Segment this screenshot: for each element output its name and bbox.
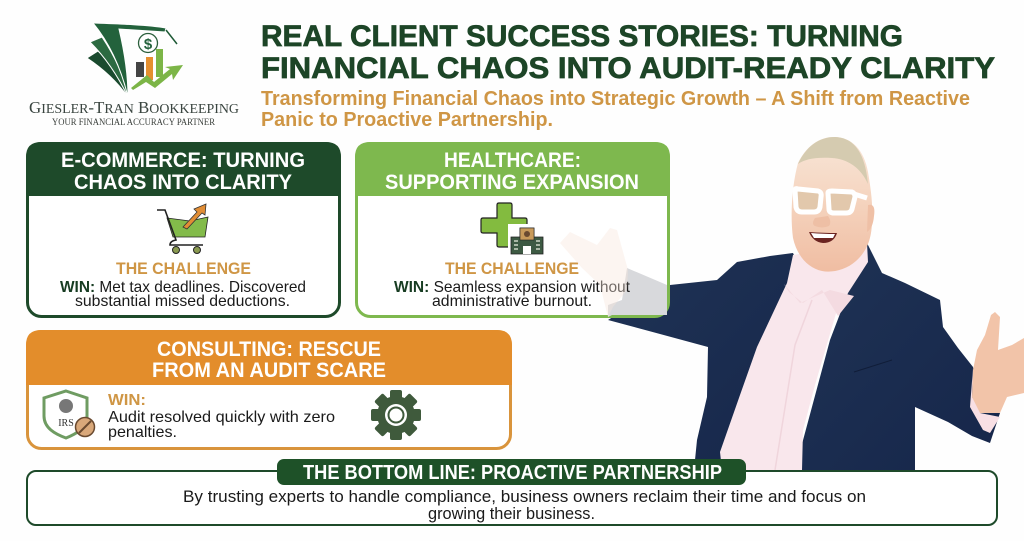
shirt [720, 243, 868, 470]
win text: Audit resolved quickly with zero [108, 409, 335, 426]
ears [867, 205, 874, 232]
win label: WIN: [108, 392, 146, 409]
win text [394, 279, 631, 310]
win text: substantial missed deductions. [75, 293, 290, 310]
jacket right side and sleeve [795, 243, 1000, 470]
white glasses [795, 189, 855, 213]
win text [60, 279, 306, 310]
panel: bottom line [27, 459, 997, 525]
ghost hand overlapping healthcare card [560, 228, 628, 317]
jacket left side and sleeve [608, 253, 815, 470]
panel: healthcare [355, 142, 670, 317]
hair [798, 137, 868, 184]
sleeve seen through card [608, 268, 667, 317]
body text [183, 487, 866, 523]
head [792, 137, 872, 272]
heading [152, 338, 386, 382]
icon: medical cross and hospital [481, 203, 545, 256]
win text: penalties. [108, 424, 177, 441]
subtitle: Transforming Financial Chaos into Strategic Growth – A Shift from Reactive [261, 87, 970, 110]
pill heading: THE BOTTOM LINE: PROACTIVE PARTNERSHIP [303, 462, 722, 484]
panel: e-commerce [26, 142, 341, 316]
heading [385, 149, 639, 194]
title [261, 20, 995, 85]
company name: GIESLER-TRAN BOOKKEEPING [29, 98, 239, 117]
win text: administrative burnout. [432, 293, 592, 310]
heading: CHAOS INTO CLARITY [74, 171, 292, 194]
body text: By trusting experts to handle compliance, business owners reclaim their time and focus on [183, 487, 866, 506]
win text [108, 409, 335, 441]
photo: presenter with open arms [608, 137, 1024, 470]
subtitle [261, 87, 970, 131]
icon: IRS shield [44, 391, 94, 438]
mouth [809, 232, 837, 243]
win text: WIN: Seamless expansion without [394, 279, 631, 296]
tagline: YOUR FINANCIAL ACCURACY PARTNER [52, 118, 216, 128]
title: FINANCIAL CHAOS INTO AUDIT-READY CLARITY [261, 52, 995, 85]
right cuff [970, 368, 1000, 433]
panel: consulting [26, 330, 512, 448]
heading: CONSULTING: RESCUE [157, 338, 381, 361]
heading: E-COMMERCE: TURNING [61, 149, 305, 172]
the challenge label: THE CHALLENGE [445, 260, 579, 278]
pocket line [854, 360, 892, 372]
title: REAL CLIENT SUCCESS STORIES: TURNING [261, 20, 903, 53]
subtitle: Panic to Proactive Partnership. [261, 108, 553, 131]
heading: SUPPORTING EXPANSION [385, 171, 639, 194]
nose [813, 216, 830, 228]
heading: HEALTHCARE: [444, 149, 581, 172]
icon: money swoosh chart: $ [144, 36, 153, 53]
right hand [972, 312, 1024, 413]
body text: growing their business. [428, 504, 595, 523]
icon: money swoosh chart [87, 23, 183, 97]
heading [61, 149, 305, 194]
heading: FROM AN AUDIT SCARE [152, 359, 386, 382]
icon: gear [371, 390, 421, 440]
win text: WIN: Met tax deadlines. Discovered [60, 279, 306, 296]
the challenge label: THE CHALLENGE [116, 260, 251, 278]
logo [29, 23, 239, 128]
icon: IRS shield: IRS [58, 418, 74, 429]
icon: shopping cart [157, 204, 208, 254]
